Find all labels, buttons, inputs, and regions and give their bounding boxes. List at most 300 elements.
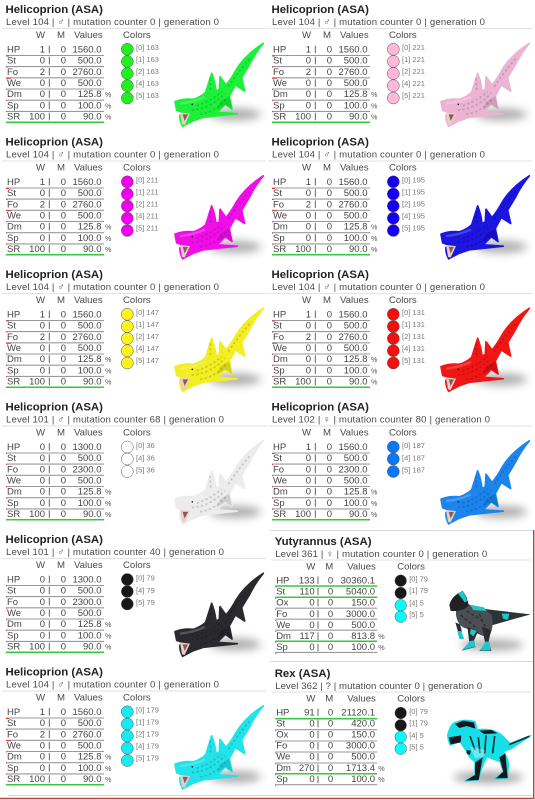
stats table: HP [273,177,286,188]
stats table: 0 [327,365,332,376]
stats table: 0 [328,587,333,598]
stats table: M [57,560,65,571]
color swatches: Colors [389,428,417,438]
stats table: 0 [61,763,66,774]
stats table: Ox [276,730,289,741]
stats table: 0 [306,210,311,222]
stats table: 500.0 [344,56,368,67]
stats table: 0 [61,365,66,376]
stats table: Fo [7,199,18,210]
stats table: Fo [7,464,18,475]
stats table: 500.0 [78,476,102,486]
stats table: Values [74,162,103,174]
stats table: 0 [306,100,311,111]
stats table: 0 [61,377,66,388]
stats table: 0 [309,752,315,763]
stats table: 0 [309,741,315,752]
stats table: 0 [61,78,66,89]
stats table: 0 [40,487,45,498]
stats table: 500.0 [344,78,368,89]
stats table: 90.0 [83,112,102,123]
stats table: 2300.0 [72,597,102,608]
stats table: St [7,718,16,729]
color swatches: [5] 131 [402,356,425,365]
stats table: 0 [40,321,45,332]
stats table: 1 [40,44,45,55]
color swatches: [1] 79 [409,586,428,595]
creature image: shark [441,308,529,391]
stats table: 1 [306,177,311,188]
stats table: W [36,295,46,306]
stats table: Dm [7,487,22,498]
card: Helicoprion azure [268,402,532,524]
stats table: 500.0 [78,608,102,619]
stats table: 100.0 [351,774,375,785]
stats table: W [302,295,312,306]
color swatches: Colors [397,562,425,572]
creature image: shark [175,441,263,524]
stats table: Values [74,692,103,704]
stats table: 100.0 [78,233,102,244]
stats table: 100.0 [78,763,102,774]
stats table: Sp [7,763,19,774]
stats table: 0 [40,763,45,774]
stats table: 500.0 [344,321,368,332]
stats table: % [371,510,378,519]
stats table: 0 [306,222,311,233]
stats table: 0 [328,752,333,763]
stats table: 0 [327,210,332,222]
stats table: 0 [40,476,45,486]
stats table: 125.8 [78,354,102,365]
stats table: % [105,753,112,762]
title: Yutyrannus (ASA) [275,536,372,548]
title: Helicoprion (ASA) [6,534,103,546]
stats table: HP [7,309,20,320]
stats table: % [378,775,385,784]
stats table: 125.8 [344,354,368,365]
stats table: 0 [40,574,45,585]
stats table: 0 [306,188,311,199]
stats table: 0 [306,78,311,89]
stats table: St [273,188,282,199]
stats table: 0 [327,309,332,320]
color swatches: [4] 179 [136,742,159,751]
color swatches: [1] 179 [136,718,159,727]
stats table: 0 [40,188,45,199]
stats table: 2300.0 [338,464,368,475]
stats table: 0 [40,608,45,619]
stats table: 100 [29,774,45,785]
stats table: Values [347,694,376,704]
stats table: 1560.0 [72,309,102,320]
stats table: 125.8 [78,89,102,100]
stats table [272,30,378,123]
stats table: 91 [304,707,315,718]
stats table: HP [273,44,286,55]
color swatches: [0] 36 [136,441,155,450]
stats table: 500.0 [344,210,368,222]
level line: Level 104 | ♂ | mutation counter 0 | generation 0 [272,17,485,28]
stats table: 0 [306,464,311,475]
stats table: 5040.0 [346,587,375,598]
stats table: W [36,428,46,438]
stats table: 500.0 [78,740,102,752]
stats table: 2760.0 [72,332,102,343]
stats table: 0 [306,343,311,354]
stats table: We [7,210,21,222]
stats table: % [105,488,112,497]
stats table: 0 [40,233,45,244]
stats table: We [7,740,21,752]
stats table: HP [7,707,20,718]
stats table: Sp [273,365,285,376]
stats table: 0 [61,740,66,752]
color swatches: [4] 163 [136,79,159,88]
stats table: 0 [306,233,311,244]
stats table: 2760.0 [72,199,102,210]
level line: Level 104 | ♂ | mutation counter 0 | generation 0 [6,680,219,690]
stats table: 90.0 [83,642,102,653]
stats table: 0 [61,67,66,78]
card: Yutyrannus [271,536,531,654]
title: Rex (ASA) [275,668,331,680]
stats table: We [7,476,21,486]
stats table: W [36,162,46,174]
stats table: Dm [273,222,288,233]
stats table: 2300.0 [72,464,102,475]
stats table: Sp [7,630,19,641]
stats table: 0 [328,631,333,642]
stats table: % [378,764,385,773]
color swatches: [0] 211 [136,176,158,185]
stats table: Fo [7,729,18,740]
title: Helicoprion (ASA) [272,4,369,16]
stats table: 0 [61,321,66,332]
stats table: 125.8 [344,89,368,100]
level line: Level 104 | ♂ | mutation counter 0 | generation 0 [6,150,219,160]
stats table: 0 [61,608,66,619]
stats table: 0 [327,442,332,453]
stats table: Dm [273,487,288,498]
level line: Level 101 | ♂ | mutation counter 40 | generation 0 [6,547,224,558]
stats table: 100.0 [344,365,368,376]
stats table: 1560.0 [72,707,102,718]
stats table: We [276,752,290,763]
stats table: 2 [306,332,311,343]
card: Helicoprion red [268,269,532,391]
stats table: % [371,113,378,122]
stats table: 1300.0 [72,574,102,585]
stats table: 0 [61,476,66,486]
stats table: 0 [328,576,333,587]
stats table [275,694,385,786]
color swatches: [1] 131 [402,320,425,329]
stats table: 0 [309,598,315,609]
color swatches: Colors [123,295,151,306]
stats table: 100.0 [344,498,368,509]
stats table: Fo [273,332,284,343]
stats table: Values [340,428,369,438]
stats table: 0 [328,609,333,620]
stats table: 90.0 [83,377,102,388]
stats table: 0 [328,598,333,609]
color swatches: [5] 5 [409,610,424,619]
creature image: shark [441,176,529,259]
stats table: St [276,587,286,598]
stats table: % [105,223,112,232]
stats table: 0 [306,89,311,100]
stats table: % [105,643,112,652]
color swatches [121,162,158,236]
stats table: 0 [61,354,66,365]
color swatches [395,562,428,622]
color swatches: [2] 195 [402,200,425,209]
color swatches: [4] 211 [136,212,158,221]
stats table: HP [7,177,20,188]
stats table: 90.0 [349,377,368,388]
stats table: St [7,321,16,332]
level line: Level 101 | ♂ | mutation counter 68 | generation 0 [6,414,224,426]
stats table: SR [7,642,20,653]
stats table [6,560,112,653]
stats table: 0 [327,199,332,210]
stats table: 0 [327,377,332,388]
creature image: shark [175,308,263,391]
level line: Level 102 | ♀ | mutation counter 80 | generation 0 [272,414,490,426]
stats table: 0 [61,774,66,785]
stats table: 0 [61,343,66,354]
stats table: Fo [276,741,287,752]
stats table: St [273,56,282,67]
stats table: Values [347,562,376,572]
color swatches: [5] 195 [402,224,425,233]
stats table: 0 [327,509,332,520]
stats table: 133 [299,576,315,587]
stats table: SR [273,244,286,255]
stats table: 1560.0 [338,177,368,188]
stats table: 0 [61,112,66,123]
stats table: Sp [273,100,285,111]
stats table: 0 [40,210,45,222]
color swatches: [4] 131 [402,344,425,353]
stats table: 0 [40,89,45,100]
stats table: 90.0 [83,774,102,785]
stats table: 0 [327,222,332,233]
stats table: Ox [276,598,289,609]
stats table: 0 [327,100,332,111]
stats table: 2760.0 [338,199,368,210]
stats table: SR [7,112,20,123]
stats table: 0 [61,44,66,55]
color swatches: [1] 163 [136,55,159,64]
stats table: 0 [327,321,332,332]
stats table: 0 [61,707,66,718]
stats table: % [378,632,385,641]
stats table: St [7,453,16,464]
color swatches: Colors [123,162,151,174]
stats table: 100.0 [344,233,368,244]
stats table: 100.0 [351,642,375,653]
stats table: 0 [61,498,66,509]
stats table: Sp [273,233,285,244]
stats table: HP [7,442,20,453]
stats table: SR [273,509,286,520]
stats table: % [105,764,112,773]
stats table: 0 [40,630,45,641]
stats table: Sp [7,100,19,111]
stats table: M [57,428,65,438]
stats table: % [105,245,112,254]
stats table: SR [273,377,286,388]
stats table: W [302,162,312,174]
color swatches [387,295,425,369]
stats table: % [105,631,112,640]
stats table: Fo [273,464,284,475]
stats table: 0 [61,89,66,100]
stats table: 420.0 [351,718,375,729]
stats table [272,162,378,255]
stats table: 0 [61,574,66,585]
stats table: HP [7,574,20,585]
stats table: W [302,30,312,41]
stats table: 0 [328,774,333,785]
color swatches: Colors [389,295,417,306]
stats table: 500.0 [78,718,102,729]
stats table: 0 [40,619,45,630]
stats table: 0 [327,67,332,78]
color swatches: Colors [123,428,151,438]
stats table: 0 [309,718,315,729]
stats table: SR [7,774,20,785]
stats table: 100 [295,509,311,520]
stats table: % [371,355,378,364]
stats table: 0 [327,89,332,100]
stats table: 0 [61,718,66,729]
stats table: We [7,608,21,619]
stats table: 813.8 [351,631,375,642]
stats table: 500.0 [344,188,368,199]
stats table: 100 [29,244,45,255]
stats table: % [371,366,378,375]
stats table [272,295,378,388]
stats table: Sp [7,233,19,244]
color swatches: [0] 79 [136,574,155,582]
stats table: 0 [61,332,66,343]
stats table: 0 [40,78,45,89]
stats table: 117 [300,631,315,642]
stats table: 125.8 [344,222,368,233]
stats table: 0 [309,620,315,631]
color swatches [121,295,159,369]
stats table: % [105,499,112,508]
stats table: 2760.0 [72,67,102,78]
stats table: 0 [61,244,66,255]
stats table: % [105,101,112,110]
stats table: We [273,476,287,486]
stats table: 100.0 [344,100,368,111]
stats table [6,162,112,255]
stats table: Dm [273,354,288,365]
color swatches: [5] 163 [136,91,159,100]
title: Helicoprion (ASA) [6,402,103,414]
card: Helicoprion cyan [2,666,266,789]
right frame border [0,530,534,798]
stats table: % [371,488,378,497]
color swatches: [0] 79 [409,707,428,716]
stats table: Values [74,295,103,306]
stats table: Sp [7,498,19,509]
stats table: 1713.4 [346,763,375,774]
stats table: 0 [61,453,66,464]
stats table: % [105,510,112,519]
stats table: 500.0 [78,453,102,464]
stats table: 0 [61,509,66,520]
stats table: % [371,101,378,110]
stats table: 500.0 [78,56,102,67]
stats table: W [36,30,46,41]
level line: Level 104 | ♂ | mutation counter 0 | generation 0 [6,282,219,293]
stats table: 100.0 [78,498,102,509]
stats table: 0 [61,177,66,188]
stats table: Dm [7,619,22,630]
stats table: 0 [306,487,311,498]
stats table: % [105,234,112,243]
stats table: 0 [40,365,45,376]
stats table: 0 [327,332,332,343]
stats table: 125.8 [78,619,102,630]
color swatches [121,30,159,104]
stats table: 500.0 [78,210,102,222]
title: Helicoprion (ASA) [6,666,103,678]
card: Rex [271,668,531,786]
color swatches: [4] 187 [402,454,425,462]
color swatches: [0] 147 [136,308,159,317]
stats table: M [57,692,65,704]
stats table: 0 [306,498,311,509]
creature image: shark [175,43,263,126]
stats table: We [7,78,21,89]
stats table: 0 [306,56,311,67]
stats table: Fo [7,597,18,608]
stats table [272,428,378,520]
color swatches: [1] 79 [409,718,428,728]
creature image: shark [175,706,263,789]
stats table: M [323,162,331,174]
stats table: 0 [327,56,332,67]
stats table: 2760.0 [338,67,368,78]
stats table: 0 [40,740,45,752]
stats table: 1 [306,309,311,320]
stats table: 0 [309,774,315,785]
stats table: 0 [61,586,66,597]
creature image: shark [441,43,529,126]
stats table: 0 [61,222,66,233]
stats table: 0 [40,354,45,365]
stats table: 100.0 [78,630,102,641]
stats table: 0 [309,730,315,741]
color swatches: [1] 195 [402,188,425,197]
stats table: 0 [327,244,332,255]
creature image: shark [441,441,529,524]
stats table: Dm [7,354,22,365]
stats table: HP [276,707,289,718]
stats table: 0 [61,752,66,763]
level line: Level 361 | ♀ | mutation counter 0 | generation 0 [275,549,487,560]
stats table: 0 [40,222,45,233]
stats table: 1560.0 [338,442,368,453]
stats table: Dm [273,89,288,100]
